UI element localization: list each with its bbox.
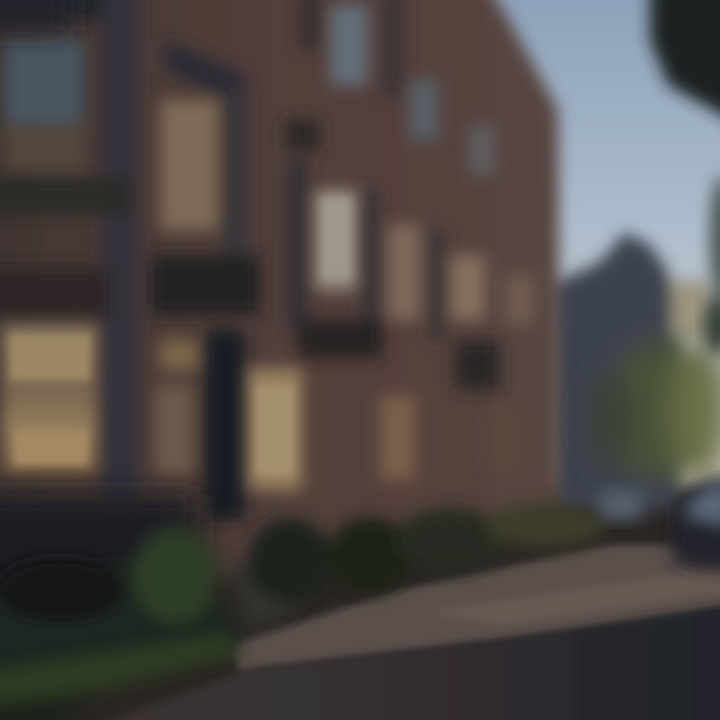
trees at right xyxy=(585,340,720,480)
windows xyxy=(2,5,535,490)
tree trunk blur right edge xyxy=(704,175,720,355)
facade details xyxy=(0,0,500,560)
lawn xyxy=(0,632,240,720)
tree canopy top right xyxy=(650,0,720,125)
sidewalk xyxy=(230,545,720,672)
road xyxy=(60,603,720,720)
distant vehicle xyxy=(600,490,642,520)
window highlights xyxy=(10,198,350,475)
distant building xyxy=(550,232,712,510)
hedge and shrubs xyxy=(0,503,605,700)
building facade xyxy=(0,0,560,590)
sky xyxy=(430,0,720,490)
parked car xyxy=(672,474,720,570)
lower wall shadow xyxy=(0,0,200,625)
